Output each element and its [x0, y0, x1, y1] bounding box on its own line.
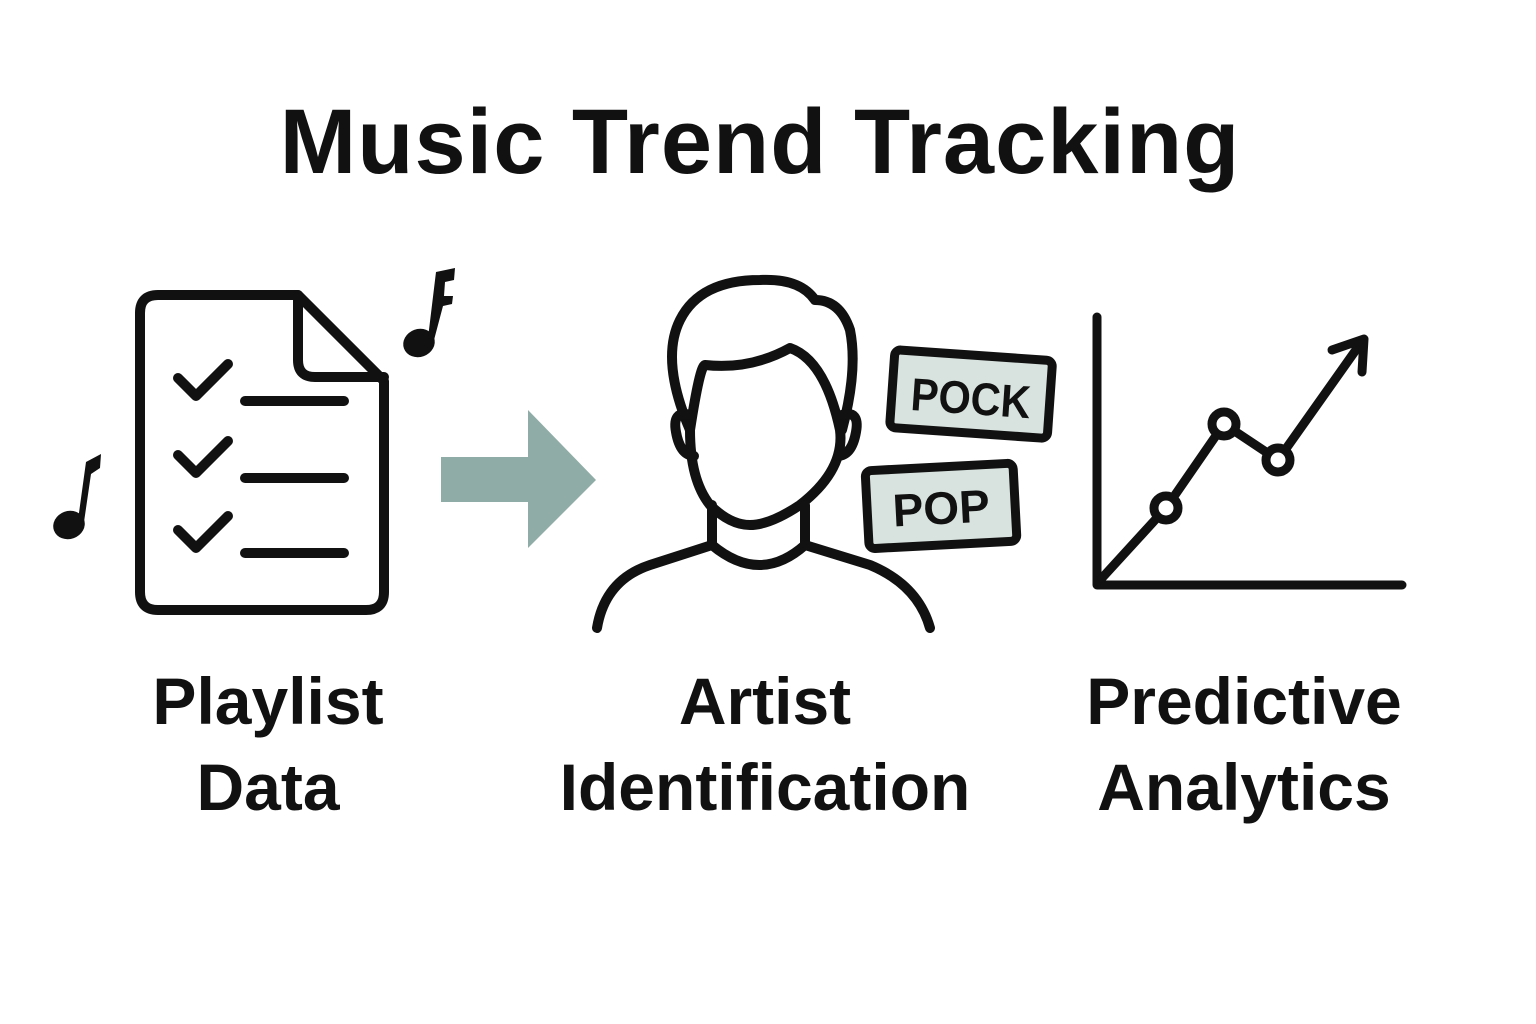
icon: playlist document	[140, 295, 384, 610]
label: artist identification: Identification	[560, 750, 970, 824]
icon: music note right	[399, 268, 455, 362]
tag: pop	[865, 463, 1017, 549]
icon: person	[597, 280, 930, 628]
title: Music Trend Tracking	[280, 91, 1240, 193]
label: artist identification: Artist	[679, 664, 851, 738]
tag: rock: POCK	[909, 368, 1032, 428]
tag: pop: POP	[891, 479, 991, 536]
tag: rock	[890, 350, 1053, 438]
arrow	[441, 410, 596, 548]
label: predictive analytics: Predictive	[1086, 664, 1402, 738]
label: predictive analytics: Analytics	[1097, 750, 1391, 824]
label: playlist data: Playlist	[152, 664, 384, 738]
icon: music note left	[49, 454, 101, 544]
label: playlist data: Data	[196, 750, 341, 824]
icon: line chart	[1097, 317, 1402, 585]
